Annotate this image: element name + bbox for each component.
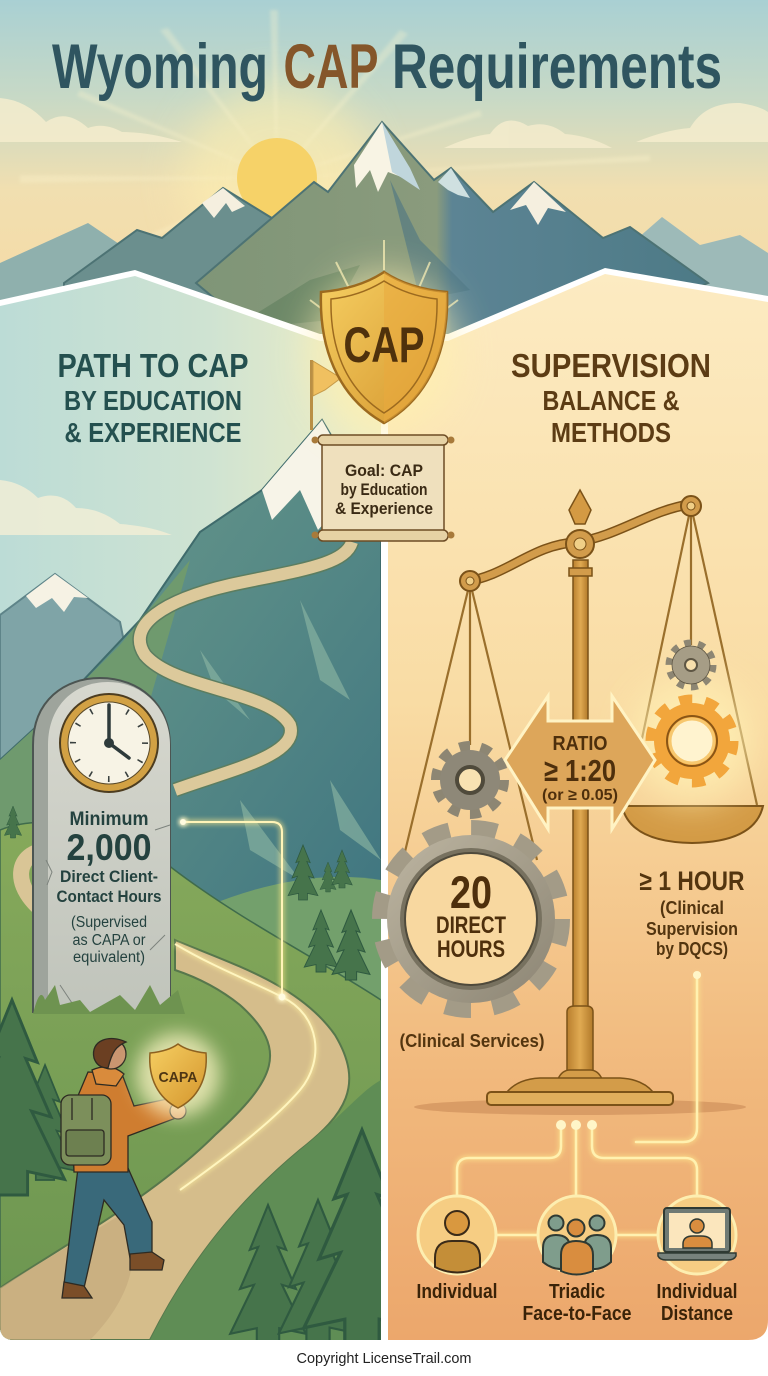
trees [0,806,420,1345]
CAPA shield [136,1033,220,1117]
title: Wyoming [52,32,268,102]
background sky [0,0,768,345]
scroll text: by Education [340,480,428,499]
right strings [628,506,757,805]
gear text: DIRECT [436,912,506,939]
stone text [56,809,162,966]
stone text: (Supervised [71,914,147,931]
sun and rays [20,10,650,276]
right heading: BALANCE & [542,385,680,416]
callout connector [178,818,287,1002]
icon: distance laptop [658,1196,736,1274]
stone text: equivalent) [73,949,145,966]
scroll text [335,461,433,518]
ratio arrow: (or ≥ 0.05) [542,787,618,804]
hiker [61,1039,186,1298]
left strings [403,582,537,860]
one hour label: ≥ 1 HOUR [640,866,744,896]
jeans [64,1168,152,1288]
balance scale [383,490,763,1115]
shield label: CAP [344,317,424,373]
icon: individual [418,1196,496,1274]
CAPA shield: CAPA [158,1069,198,1086]
glow behind orange gear [632,681,752,801]
white ridge lines [0,268,768,345]
glow behind shield [312,275,456,435]
gear text: 20 [450,867,492,918]
left clouds [0,480,172,535]
small right gear [670,644,712,686]
left heading: & EXPERIENCE [64,417,242,448]
finial [569,490,591,524]
title [52,32,722,102]
stone text: Contact Hours [56,887,162,906]
method labels: Triadic [549,1281,605,1303]
hand [170,1103,186,1119]
ground shadow [414,1099,746,1115]
boots [62,1282,92,1298]
left heading: PATH TO CAP [58,347,248,384]
one hour label: Supervision [646,918,738,939]
stone text: Direct Client- [60,867,158,886]
post [573,560,588,1010]
method labels: Individual [416,1281,498,1303]
main green hill [0,822,381,1340]
scroll text: Goal: CAP [345,461,423,480]
backpack [61,1095,111,1165]
mountain trail [140,542,352,790]
right heading [511,347,711,448]
winding trail [0,940,349,1340]
ratio arrow [505,696,655,829]
stone text: Minimum [70,809,148,830]
ratio arrow: ≥ 1:20 [544,753,616,788]
jacket [72,1072,176,1172]
icon: triadic [538,1196,616,1274]
big mountain [0,418,381,901]
clock [60,694,158,792]
one hour label: (Clinical [660,897,724,918]
stone text: 2,000 [66,827,152,868]
clouds [0,98,768,148]
left heading [58,347,248,448]
right heading: SUPERVISION [511,347,711,384]
small left gear [437,747,503,813]
supervision method connectors [457,971,701,1235]
one hour label [640,866,744,959]
right small hill [220,877,381,999]
center divider [381,540,388,1340]
one hour label: by DQCS) [656,938,728,959]
goal scroll [312,435,454,541]
head [96,1039,126,1069]
milestone stone [33,678,185,1014]
far mountain [0,572,124,758]
far left trail bend [13,846,32,912]
panel: right [388,274,768,1340]
bottom dark grass [150,1080,381,1340]
method labels: Individual [656,1281,738,1303]
glowing trail line [175,944,315,1190]
mountain range [0,122,768,345]
scroll text: & Experience [335,499,433,518]
method labels: Distance [661,1303,733,1325]
neck and base [567,1006,593,1072]
big gear [383,831,559,1007]
right pan [622,806,763,843]
clinical services label: (Clinical Services) [400,1031,545,1051]
gear text [436,867,506,963]
title: CAP [284,32,378,102]
left heading: BY EDUCATION [64,385,242,416]
beam [464,504,692,582]
gear text: HOURS [437,936,505,963]
ratio arrow: RATIO [552,733,608,755]
CAP shield [310,240,458,423]
orange gear [651,700,733,782]
flag [310,360,341,430]
method labels [416,1281,738,1325]
panel: left [0,276,381,1340]
right heading: METHODS [551,417,671,448]
stone text: as CAPA or [72,932,146,949]
hood [92,1067,124,1086]
copyright: Copyright LicenseTrail.com [296,1351,472,1367]
method labels: Face-to-Face [522,1303,632,1325]
